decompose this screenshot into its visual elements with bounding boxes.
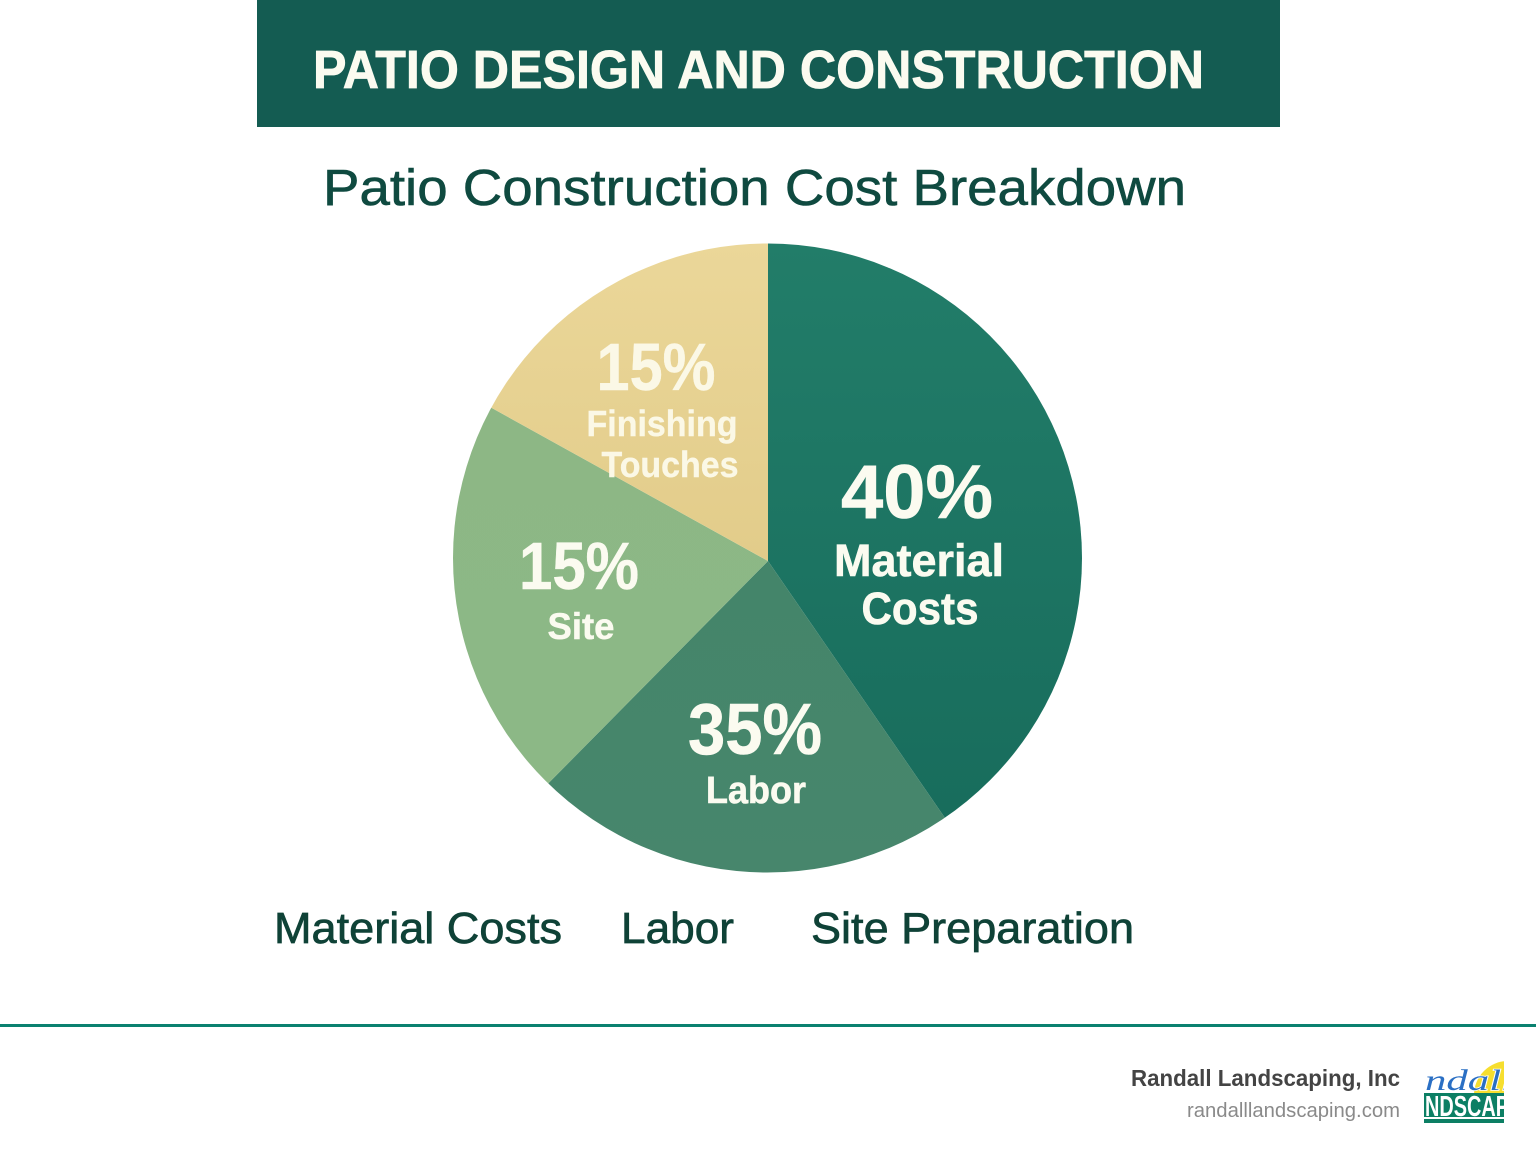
label: finishing touches [586, 330, 738, 485]
legend labels: Site Preparation [811, 904, 1134, 953]
title banner [257, 0, 1280, 127]
legend labels: Labor [621, 904, 734, 953]
legend labels [274, 904, 1134, 953]
label: material costs [834, 450, 1004, 634]
label: labor [688, 690, 822, 812]
label: material costs: Material [834, 535, 1004, 586]
chart heading: Patio Construction Cost Breakdown [323, 159, 1186, 216]
label: site [519, 529, 639, 647]
title banner: PATIO DESIGN AND CONSTRUCTION [313, 40, 1204, 100]
label: labor: Labor [706, 770, 806, 812]
pie chart [453, 244, 1082, 872]
label: site: Site [548, 606, 614, 647]
slice: site 15% [453, 408, 768, 784]
legend labels: Material Costs [274, 904, 562, 953]
label: finishing touches: Finishing [586, 403, 738, 444]
label: labor: 35% [688, 690, 822, 770]
label: material costs: Costs [862, 583, 978, 634]
footer company name: Randall Landscaping, Inc [1131, 1065, 1400, 1091]
logo sun [1474, 1061, 1504, 1093]
label: site: 15% [519, 529, 639, 604]
footer website: randalllandscaping.com [1187, 1100, 1400, 1122]
slice: labor 35% [548, 561, 945, 872]
slice: material costs 40% [768, 244, 1082, 818]
footer divider [0, 1024, 1536, 1027]
footer logo [1424, 1061, 1504, 1123]
label: finishing touches: Touches [602, 444, 738, 485]
label: material costs: 40% [841, 450, 993, 535]
logo band wordmark [1424, 1093, 1504, 1117]
logo underline [1424, 1119, 1504, 1123]
logo script wordmark: ndall [1425, 1064, 1513, 1097]
slice: finishing touches 15% [491, 244, 768, 561]
label: finishing touches: 15% [596, 330, 716, 405]
